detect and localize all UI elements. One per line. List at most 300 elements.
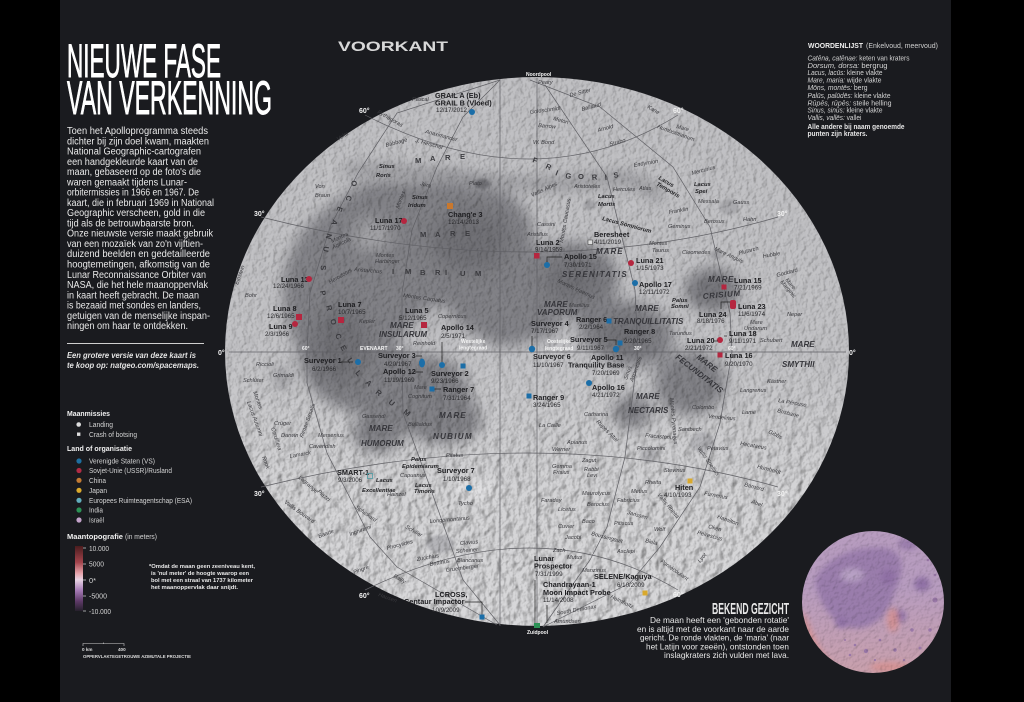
title	[67, 34, 272, 124]
crater and feature names: Pitatus	[446, 453, 463, 459]
crater and feature names: Mare Anguis	[713, 246, 744, 265]
crater and feature names: Pythagoras	[376, 110, 404, 129]
scale bar and projection: 400	[118, 647, 126, 652]
crater and feature names: Gassendi	[362, 414, 386, 420]
crater and feature names: Barrow	[538, 123, 557, 131]
crater and feature names: Schickard	[354, 505, 378, 524]
graticule degree labels: 30°	[254, 490, 265, 498]
crater and feature names	[234, 80, 807, 625]
crater and feature names: Vendelinus	[708, 414, 736, 422]
glossary: Sinus, sinūs: kleine vlakte	[808, 108, 883, 114]
crater and feature names: Rupes Altai	[595, 419, 619, 444]
mare names: NUBIUM	[433, 432, 473, 441]
crater and feature names: Asclepi	[616, 549, 636, 555]
crater and feature names: Gibbs	[767, 429, 783, 441]
mission: Luna 17: 11/17/1970	[370, 225, 401, 232]
glossary: (Enkelvoud, meervoud)	[866, 43, 938, 50]
crater and feature names: Hercules	[613, 187, 635, 193]
mission: Luna 23: 11/6/1974	[738, 311, 766, 318]
mare names: TRANQUILLITATIS	[613, 317, 684, 326]
mare names: SERENITATIS	[562, 270, 628, 279]
intro text block: Toen het Apolloprogramma steeds	[67, 126, 208, 137]
crater and feature names: Pitiscus	[614, 521, 633, 527]
crater and feature names: Vallis Alpes	[530, 181, 559, 199]
mission: Luna 13: Luna 13	[281, 275, 309, 284]
crater and feature names: Lacus	[657, 176, 675, 189]
scale bar and projection: OPPERVLAKTEGETROUWE AZIMUTALE PROJECTIE	[83, 654, 191, 659]
mare names: FRIGORIS	[531, 155, 619, 182]
legend: maantopografie scale: 5000	[89, 562, 104, 568]
mission: Luna 18: Luna 18	[729, 329, 757, 338]
mission: Hiten: 4/10/1993	[664, 492, 692, 499]
intro text block: Geographic verscheen, gold in die	[67, 208, 205, 219]
crater and feature names: Rimae Sirsalis	[299, 403, 317, 439]
mission: Beresheet: 4/11/2019	[594, 239, 622, 246]
mare names: MARE	[596, 247, 624, 256]
crater and feature names: Lacus Somniorum	[601, 216, 652, 235]
graticule degree labels	[218, 72, 856, 636]
crater and feature names: Langrenus	[740, 388, 767, 394]
mission: Luna 20: 2/21/1972	[685, 345, 713, 352]
mission: SMART-1	[337, 468, 372, 484]
topographic moon	[800, 530, 946, 674]
crater and feature names: Abel	[749, 499, 764, 509]
crater and feature names: Cuvier	[558, 524, 575, 530]
intro text block: kaart, die in februari 1969 in National	[67, 198, 214, 209]
crater and feature names: Volta	[336, 131, 350, 143]
mission: Ranger 7	[430, 385, 474, 402]
crater and feature names: Atlas	[638, 186, 652, 192]
mission: Luna 16: Luna 16	[725, 351, 753, 360]
mission: Luna 15: 7/21/1969	[734, 284, 762, 292]
crater and feature names: Vallis Bouvard	[283, 500, 316, 526]
glossary: WOORDENLIJST	[808, 43, 864, 50]
graticule degree labels: Oostelijke	[547, 339, 571, 345]
crater and feature names: Lagrange	[297, 475, 319, 495]
mare names: MARE	[695, 352, 719, 374]
crater and feature names: Lacus	[415, 483, 433, 489]
crater and feature names: Arnold	[596, 124, 615, 134]
mission: Lunar Prospector: Prospector	[534, 562, 573, 570]
mission: Luna 2: Luna 2	[536, 238, 560, 247]
crater and feature names: Furnerius	[704, 491, 728, 501]
graticule degree labels: 30°	[777, 490, 788, 498]
crater and feature names: Gruemberger	[445, 563, 480, 574]
crater and feature names: Catharina	[584, 412, 608, 418]
crater and feature names: J. Herschel	[414, 138, 444, 151]
crater and feature names: Metius	[631, 489, 648, 495]
crater and feature names: Montes Carpatus	[403, 293, 446, 305]
crater and feature names: Mercurius	[691, 165, 716, 177]
mare names: MARE	[415, 152, 465, 165]
mission: Luna 9: Luna 9	[269, 322, 293, 331]
mission: GRAIL: GRAIL B (Vloed)	[435, 98, 492, 108]
crater and feature names: Cleomedes	[682, 250, 710, 256]
mission: SELENE/Kaguya: 6/10/2009	[617, 582, 645, 589]
crater and feature names: South Demonax	[556, 604, 597, 617]
mission: SMART-1: 9/3/2006	[338, 477, 363, 484]
mission: Lunar Prospector: Lunar	[534, 554, 554, 563]
crater and feature names: Palus	[411, 457, 427, 463]
crater and feature names: Undarum	[744, 326, 767, 332]
intro text block: orbitermissies in 1966 en 1967. De	[67, 188, 199, 199]
text: bekend gezicht: De maan heeft een 'gebonden rotatie'	[650, 615, 789, 625]
mare names: MARE	[439, 411, 467, 420]
glossary: Alle andere bij naam genoemde	[808, 124, 905, 131]
graticule degree labels: 60°	[302, 346, 310, 352]
crater and feature names: Plato	[469, 181, 482, 187]
mission: Ranger 8: 2/20/1965	[624, 338, 652, 345]
crater and feature names: Darwin	[281, 433, 298, 439]
crater and feature names: Anaximander	[424, 129, 459, 144]
mission: Luna 20: Luna 20	[687, 336, 715, 345]
sea level footnote	[149, 564, 255, 591]
crater and feature names: Santbech	[678, 427, 702, 433]
crater and feature names: Meton	[552, 116, 569, 126]
crater and feature names: Pontécoulant	[659, 559, 689, 583]
text: bekend gezicht	[637, 615, 789, 660]
graticule degree labels: 30°	[777, 210, 788, 218]
crater and feature names: Zach	[552, 548, 565, 554]
mission: Chang'e 3: Chang'e 3	[448, 210, 483, 219]
mission: Luna 2: 9/14/1959	[535, 246, 563, 254]
mission: Apollo 11: Tranquility Base	[568, 360, 624, 370]
mare names: FECUNDITATIS	[674, 352, 725, 395]
crater and feature names: Schiller	[404, 525, 424, 539]
mission: Luna 13	[273, 275, 312, 290]
mission: Surveyor 6: 11/10/1967	[533, 362, 564, 369]
crater and feature names: Harbinger	[375, 259, 401, 265]
mare names: OCEANUS	[319, 180, 359, 271]
mission: Ranger 9: Ranger 9	[533, 393, 564, 402]
sea level footnote: *Omdat de maan geen zeeniveau kent,	[149, 564, 255, 570]
mare names: IMBRIUM	[392, 267, 481, 278]
mission: Beresheet: Beresheet	[594, 230, 630, 239]
mission: Luna 8	[267, 304, 302, 320]
mission: Ranger 9	[526, 393, 564, 409]
mission: Surveyor 2	[431, 364, 469, 385]
crater and feature names: Reinhold	[413, 341, 436, 347]
mission: Apollo 16: 4/21/1972	[592, 392, 620, 399]
crater and feature names: Fabricius	[617, 498, 640, 504]
crater and feature names: Franklin	[668, 207, 689, 216]
graticule degree labels: 60°	[673, 107, 684, 115]
mission: GRAIL	[435, 91, 492, 115]
mission: Surveyor 5: Surveyor 5	[570, 335, 608, 344]
intro text block: een handgekleurde kaart van de	[67, 157, 198, 168]
crater and feature names: Apianus	[566, 440, 587, 446]
intro text block: van een mozaïek van zo'n vijftien-	[67, 239, 203, 250]
crater and feature names: Bailly	[392, 574, 408, 586]
title: NIEUWE FASE	[67, 34, 221, 87]
graticule degree labels: 30°	[634, 346, 642, 352]
legend: maantopografie scale	[67, 532, 157, 616]
crater and feature names: Copernicus	[438, 314, 466, 320]
legend: land of organisatie: Verenigde Staten (VS)	[89, 458, 155, 466]
crater and feature names: Agricola	[330, 237, 352, 251]
crater and feature names: Zucchius	[415, 553, 440, 563]
crater and feature names: Lacus	[694, 182, 712, 188]
mission: Apollo 15	[544, 252, 597, 269]
legend: land of organisatie	[67, 444, 192, 524]
legend: maantopografie scale: 10.000	[89, 546, 109, 553]
mission: Surveyor 6: Surveyor 6	[533, 352, 571, 361]
mission: Luna 24	[697, 302, 730, 325]
graticule degree labels: lengtegraad	[545, 346, 573, 352]
crater and feature names: Boussingault	[590, 531, 623, 545]
mission: Apollo 14: Apollo 14	[441, 323, 475, 332]
crater and feature names: Hamilton	[716, 514, 739, 527]
mission: Apollo 14	[439, 323, 475, 368]
mission: SMART-1: SMART-1	[337, 468, 369, 477]
mare names: VAPORUM	[537, 308, 578, 317]
crater and feature names: Manilius	[569, 303, 590, 309]
crater and feature names: Palus	[672, 298, 688, 304]
mission: Chang'e 3	[447, 203, 483, 226]
crater and feature names: Hubble	[762, 251, 781, 260]
purchase note: Een grotere versie van deze kaart is	[67, 351, 197, 360]
mission: Luna 7: Luna 7	[338, 300, 362, 309]
mission: Surveyor 3 and Apollo 12	[378, 351, 425, 384]
crater and feature names: Montes	[330, 232, 350, 245]
crater and feature names: Kepler	[359, 319, 376, 325]
mission: Luna 16: 9/20/1970	[725, 361, 753, 368]
mission: Luna 16	[718, 351, 753, 368]
crater and feature names: Pascal	[412, 97, 430, 103]
crater and feature names: Vallis Snellius	[695, 446, 720, 477]
crater and feature names: Bettinus	[429, 559, 450, 568]
mare names: MARE	[390, 321, 414, 330]
mission: LCROSS: Centaur Impactor	[404, 597, 465, 606]
crater and feature names: Mersenius	[318, 433, 344, 439]
mission: Surveyor 2: Surveyor 2	[431, 369, 469, 378]
crater and feature names: Baco	[582, 519, 595, 525]
crater and feature names: Sinus	[379, 164, 396, 170]
crater and feature names: Taruntius	[669, 331, 692, 337]
intro text block: tijd als de betrouwbaarste bron.	[67, 218, 194, 229]
legend: maanmissies: Maanmissies	[67, 409, 110, 418]
mission: Luna 8: Luna 8	[273, 304, 297, 313]
mission: GRAIL: 12/17/2012	[436, 107, 468, 114]
crater and feature names: Bohr	[245, 293, 258, 299]
crater and feature names: Aristillus	[526, 232, 548, 238]
legend: maanmissies: Crash of botsing	[89, 432, 137, 439]
crater and feature names: Einstein	[234, 265, 247, 286]
graticule degree labels: 60°	[673, 591, 684, 599]
crater and feature names: Gauss	[733, 200, 749, 206]
crater and feature names: Jacobi	[564, 535, 582, 541]
crater and feature names: Hainzel	[387, 492, 406, 498]
mission: Chandrayaan-1: 11/14/2008	[543, 597, 574, 604]
intro text block: National Geographic-cartografen	[67, 146, 201, 158]
mission: Luna 5: Luna 5	[405, 306, 429, 315]
mission: Luna 13: 12/24/1966	[273, 283, 305, 290]
mission: Luna 5: 5/12/1965	[399, 315, 427, 322]
mare names: MARE	[635, 304, 659, 313]
crater and feature names: Crüger	[274, 421, 292, 427]
crater and feature names: Rabbi	[584, 467, 599, 473]
crater and feature names: Lacus	[376, 478, 394, 484]
purchase note: te koop op: natgeo.com/spacemaps.	[67, 361, 199, 370]
crater and feature names: Lacus Autumni	[245, 401, 264, 438]
mission: Surveyor 4	[529, 319, 570, 352]
crater and feature names: Biela	[644, 538, 658, 547]
mission: Surveyor 3 and Apollo 12: Surveyor 3	[378, 351, 416, 360]
mission: Luna 18	[717, 329, 757, 345]
intro text block: is bezaaid met sondes en landers,	[67, 301, 201, 312]
graticule	[229, 78, 846, 627]
crater and feature names: Geminus	[668, 224, 691, 230]
mare names: INSULARUM	[379, 330, 427, 339]
crater and feature names: Mare	[414, 385, 427, 391]
crater and feature names: La Caille	[539, 423, 561, 429]
legend: land of organisatie: India	[89, 508, 103, 514]
glossary: Catēna, catēnae: keten van kraters	[808, 56, 910, 62]
moon map: near side	[218, 70, 860, 636]
glossary: Rūpēs, rūpēs: steile helling	[808, 100, 892, 108]
mission: Luna 9	[265, 321, 298, 338]
mission: Ranger 6: Ranger 6	[576, 315, 607, 324]
mission: Surveyor 7: 1/10/1968	[443, 476, 471, 483]
crater and feature names: Braun	[315, 193, 330, 199]
crater and feature names: Wolf	[654, 527, 667, 533]
crater and feature names: La Pérouse	[778, 398, 807, 409]
graticule degree labels: 0°	[849, 349, 856, 357]
crater and feature names: Peirescius	[696, 530, 723, 543]
intro text block: duizend beelden en gedetailleerde	[67, 249, 210, 260]
mission: Luna 7: 10/7/1965	[338, 309, 366, 316]
crater and feature names: Vallis Rheita	[655, 492, 680, 520]
crater and feature names: Helmholtz	[609, 594, 634, 610]
crater and feature names: Rheita	[645, 480, 661, 486]
crater and feature names: Herodotus	[328, 268, 354, 286]
mission: SELENE/Kaguya: SELENE/Kaguya	[594, 572, 653, 581]
mission: Ranger 8: Ranger 8	[624, 327, 655, 336]
mission: Surveyor 7: Surveyor 7	[437, 466, 475, 475]
mission: Luna 15	[722, 276, 762, 292]
crater and feature names: Goldschmidt	[529, 106, 562, 116]
crater and feature names: Baillaud	[581, 102, 603, 113]
crater and feature names: Frisius	[553, 470, 570, 476]
crater and feature names: Montes	[251, 391, 263, 410]
crater and feature names: Baade	[318, 529, 335, 540]
mission: GRAIL: GRAIL A (Eb)	[435, 91, 481, 100]
crater and feature names: Temporis	[655, 182, 681, 200]
intro text block: hoogtemetingen, afkomstig van de	[67, 260, 210, 270]
mission: Hiten: Hiten	[675, 483, 693, 492]
crater and feature names: Epidemiarum	[402, 464, 439, 470]
mission: Apollo 16	[586, 380, 625, 399]
crater and feature names: Cordillera	[269, 427, 282, 451]
mission: Luna 24: Luna 24	[699, 310, 728, 319]
scale bar and projection	[82, 642, 191, 659]
crater and feature names: Asperitatis	[629, 356, 644, 384]
mission: Lunar Prospector	[534, 554, 573, 623]
crater and feature names: Kästner	[767, 379, 787, 385]
glossary: Dorsum, dorsa: bergrug	[808, 63, 888, 70]
intro text block: Lunar Reconnaissance Orbiter van	[67, 270, 206, 281]
crater and feature names: Rook	[260, 456, 271, 471]
crater and feature names: Schubert	[760, 338, 783, 344]
mission: Apollo 15: 7/30/1971	[564, 262, 592, 269]
mission: Luna 23: Luna 23	[738, 302, 766, 311]
glossary: Lacus, lacūs: kleine vlakte	[808, 70, 883, 77]
mission: Luna 7	[338, 300, 366, 323]
crater and feature names: Blancanus	[457, 558, 483, 564]
mission: Apollo 11	[568, 346, 624, 377]
mission: Apollo 17: 12/11/1972	[639, 289, 670, 296]
intro text block: maan, gebaseerd op de foto's die	[67, 167, 201, 178]
crater and feature names: Hecataeus	[740, 441, 767, 452]
crater and feature names: Lacus	[598, 194, 616, 200]
crater and feature names: Lyot	[697, 552, 709, 564]
mission: Surveyor 3 and Apollo 12: 4/20/1967	[384, 361, 412, 368]
mission: Luna 2	[534, 238, 563, 258]
sea level footnote: bol met een straal van 1737 kilometer	[151, 578, 254, 584]
graticule degree labels: Noordpool	[526, 72, 552, 78]
crater and feature names: Fracastorius	[645, 433, 676, 442]
crater and feature names: W. Bond	[533, 140, 555, 146]
crater and feature names: Kane	[646, 105, 660, 116]
crater and feature names: Hausen	[377, 592, 397, 604]
legend: land of organisatie: Land of organisatie	[67, 444, 132, 453]
crater and feature names: Spei	[695, 189, 708, 195]
glossary: Mōns, montēs: berg	[808, 85, 868, 92]
crater and feature names: Brisbane	[776, 408, 799, 420]
mission: Surveyor 4: Surveyor 4	[531, 319, 570, 328]
crater and feature names: Bullialdus	[408, 422, 432, 428]
mission: Surveyor 4: 7/17/1967	[531, 328, 559, 335]
crater and feature names: Stevinus	[664, 468, 686, 474]
mission: Luna 17: Luna 17	[375, 216, 403, 225]
mission: Luna 24: 8/18/1976	[697, 318, 725, 325]
mission: Surveyor 1: Surveyor 1	[304, 356, 342, 365]
crater and feature names: Barocius	[587, 502, 609, 508]
intro text block: ningen om haar te ontdekken.	[67, 321, 188, 332]
mission: Beresheet	[588, 230, 630, 246]
crater and feature names: Aristoteles	[573, 184, 600, 190]
crater and feature names: Von	[315, 184, 325, 190]
crater and feature names: Sinus	[623, 365, 634, 381]
crater and feature names: Gemma	[552, 464, 572, 470]
crater and feature names: Sinus	[412, 195, 429, 201]
crater and feature names: Cognitum	[408, 394, 432, 400]
mission: Apollo 17	[632, 280, 672, 296]
heading: bekend gezicht: BEKEND GEZICHT	[712, 601, 789, 618]
mission: Luna 20	[685, 336, 718, 352]
mission: Surveyor 3 and Apollo 12: Apollo 12	[383, 367, 416, 376]
mare names: SMYTHII	[782, 360, 815, 369]
glossary: Palūs, palūdēs: kleine vlakte	[808, 93, 891, 100]
crater and feature names: Mare	[783, 277, 796, 291]
crater and feature names: Peary	[538, 80, 554, 86]
mission: LCROSS: 10/9/2009	[432, 607, 460, 614]
mission: Luna 21	[628, 256, 664, 272]
crater and feature names: Berosus	[704, 219, 725, 225]
heading: voorkant: VOORKANT	[338, 38, 449, 54]
mission: Surveyor 7	[437, 466, 475, 491]
crater and feature names: Marginis	[778, 279, 797, 300]
crater and feature names: Oken	[707, 524, 722, 533]
crater and feature names: Montes Haemus	[556, 278, 596, 301]
intro text block	[66, 126, 214, 332]
mission: Surveyor 5: 9/11/1967	[577, 345, 605, 352]
glossary: Mare, maria: wijde vlakte	[808, 78, 882, 84]
crater and feature names: Werner	[552, 447, 571, 453]
crater and feature names: Longomontanus	[430, 516, 470, 525]
legend: maantopografie scale: 0*	[89, 578, 96, 585]
mission: Apollo 15: Apollo 15	[564, 252, 597, 261]
